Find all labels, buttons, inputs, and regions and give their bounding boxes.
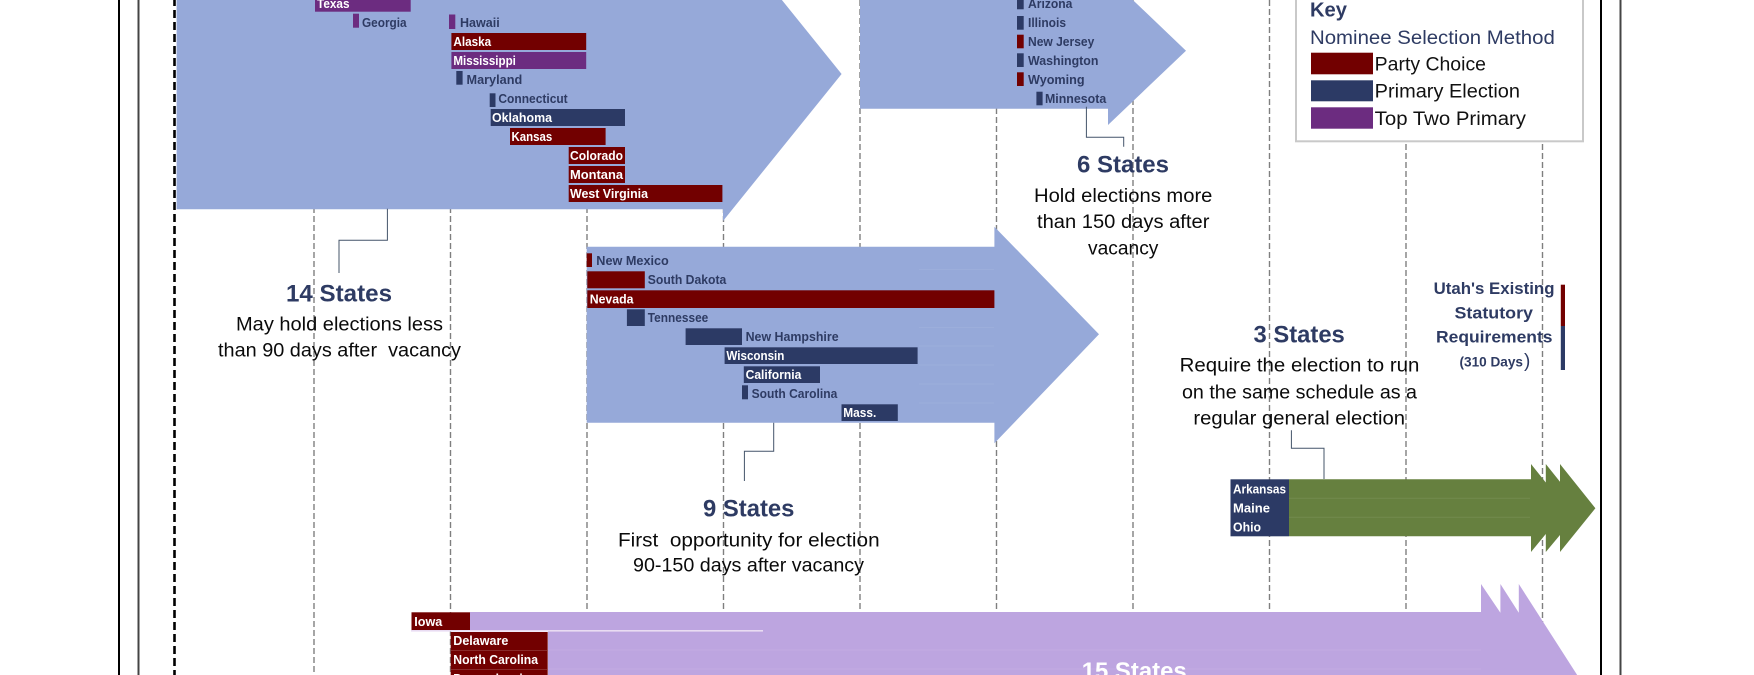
state bars: 15 states	[412, 612, 548, 675]
panel: key	[1296, 0, 1583, 141]
legend: top two primary: Top Two Primary	[1375, 109, 1527, 130]
state bars: 9 states: Mass.	[843, 406, 876, 420]
state bars: 9 states: California	[746, 368, 802, 382]
text: 14 states description: May hold elections less	[236, 315, 443, 336]
text: 6 states description: than 150 days after	[1037, 212, 1210, 233]
connector: 14 states callout	[339, 209, 387, 273]
heading: 3 States: 3 States	[1254, 322, 1345, 349]
legend: party choice	[1311, 53, 1486, 76]
text: 6 states description: Hold elections more	[1034, 186, 1212, 207]
state bars: 6 states: Washington	[1028, 54, 1098, 68]
panel: 14 states arrow	[177, 0, 842, 362]
state bars: 14 states: Georgia	[362, 16, 408, 30]
state bars: 15 states: Delaware	[453, 634, 508, 648]
state bars: 6 states: Illinois	[1028, 16, 1066, 30]
state labels: 3 states: Ohio	[1233, 520, 1261, 534]
state bars: 9 states: South Dakota	[648, 273, 727, 287]
callout: Utah statutory requirements: Statutory	[1454, 303, 1534, 322]
state bars: 14 states: Montana	[570, 168, 624, 182]
panel: 3 states arrow	[1180, 322, 1595, 552]
text: 3 states description: regular general election	[1193, 409, 1405, 430]
text: 3 states description: on the same schedule as a	[1182, 382, 1417, 403]
state bars: 14 states: Connecticut	[498, 92, 568, 106]
state labels: 3 states: Maine	[1233, 502, 1270, 516]
state bars: 6 states	[1017, 0, 1107, 106]
arrow: blue 6 states	[860, 0, 1186, 125]
arrow: purple 15 states	[470, 584, 1590, 675]
state labels: 3 states: Arkansas	[1233, 482, 1286, 496]
arrow: green 3 states	[1289, 464, 1595, 552]
state bars: 6 states: New Jersey	[1028, 35, 1094, 49]
state bars: 14 states: Alaska	[453, 35, 492, 49]
text: 3 states description: Require the election to run	[1180, 356, 1419, 377]
callout: Utah statutory requirements: Utah's Existing	[1434, 279, 1554, 298]
text: 9 states description: 90-150 days after vacancy	[633, 556, 865, 577]
text: 9 states description: First opportunity for election	[618, 530, 880, 551]
callout: Utah statutory requirements: Requirements	[1436, 328, 1552, 347]
state bars: 14 states: Oklahoma	[492, 111, 553, 125]
state bars: 9 states: New Mexico	[596, 254, 669, 268]
panel: 9 states arrow	[587, 227, 1099, 577]
state bars: 14 states: West Virginia	[570, 187, 649, 201]
connector: 3 states callout	[1291, 430, 1324, 479]
heading: 14 States: 14 States	[286, 281, 392, 308]
highlight line under Iowa	[411, 630, 763, 632]
text: 3 states description	[1180, 356, 1419, 430]
callout: Utah statutory requirements: )	[1524, 351, 1530, 372]
connector: 6 states callout	[1086, 107, 1124, 147]
state bars: 9 states: Nevada	[590, 292, 635, 306]
state bars: 9 states: South Carolina	[752, 387, 838, 401]
text: 6 states description: vacancy	[1088, 238, 1159, 259]
state bars: 14 states: Mississippi	[453, 54, 516, 68]
state bars: 6 states: Minnesota	[1045, 92, 1107, 106]
callout: Utah statutory requirements: (310 Days	[1460, 354, 1523, 370]
connector: 9 states callout	[744, 423, 774, 481]
state bars: 6 states: Wyoming	[1028, 73, 1085, 87]
key heading: Key	[1310, 0, 1348, 22]
text: 9 states description	[618, 530, 880, 577]
legend: top two primary	[1311, 107, 1527, 130]
legend: primary election: Primary Election	[1375, 82, 1520, 103]
panel: 15 states arrow	[411, 584, 1590, 675]
state labels: 3 states	[1230, 479, 1289, 536]
arrow: blue 14 states	[177, 0, 842, 221]
state bars: 9 states: Wisconsin	[726, 349, 784, 363]
callout: Utah statutory requirements	[1434, 279, 1565, 372]
text: 14 states description: than 90 days after vacancy	[218, 341, 462, 362]
state bars: 14 states: Colorado	[570, 149, 623, 163]
state bars: 14 states: Maryland	[466, 73, 522, 87]
legend: primary election	[1311, 80, 1520, 103]
legend: party choice: Party Choice	[1375, 55, 1486, 76]
state bars: 14 states: Hawaii	[460, 16, 500, 30]
state bars: 9 states: New Hampshire	[746, 330, 839, 344]
panel: 6 states arrow	[860, 0, 1212, 259]
state bars: 14 states: Kansas	[512, 130, 552, 144]
state bars: 9 states	[587, 253, 994, 421]
state bars: 9 states: Tennessee	[648, 311, 708, 325]
state bars: 15 states: North Carolina	[453, 653, 539, 667]
text: 14 states description	[218, 315, 462, 362]
state bars: 14 states	[315, 0, 722, 202]
key box	[1296, 0, 1583, 141]
state bars: 15 states: Iowa	[414, 615, 443, 629]
heading: 9 States: 9 States	[703, 496, 794, 523]
text: 6 states description	[1034, 186, 1212, 259]
arrow: blue 9 states	[587, 227, 1099, 443]
heading: 6 States: 6 States	[1077, 152, 1169, 179]
key subheading: Nominee Selection Method	[1310, 28, 1555, 49]
